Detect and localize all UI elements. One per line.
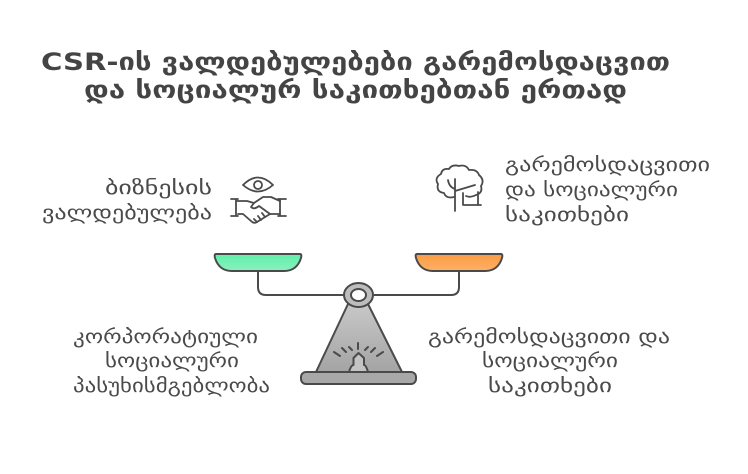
title: და სოციალურ საკითხებთან ერთად [84, 76, 627, 104]
text block: environmental and social issues (bottom right): საკითხები [488, 374, 612, 397]
text block: corporate social responsibility: კორპორატიული [73, 325, 258, 348]
text block: environmental and social issues (top right) [505, 153, 710, 226]
text block: environmental and social issues (top right): საკითხები [505, 203, 629, 226]
left pan: green [215, 254, 301, 271]
base [301, 372, 416, 384]
right pan: orange [416, 254, 502, 271]
icon: eye and handshake [231, 178, 286, 223]
text block: environmental and social issues (top right): და სოციალური [505, 178, 678, 201]
balance scale [215, 254, 502, 384]
icon: tree [437, 165, 483, 211]
text block: corporate social responsibility: სოციალური [105, 349, 239, 372]
text block: business obligation: ვალდებულება [42, 201, 212, 224]
pivot [344, 283, 373, 307]
text block: corporate social responsibility: პასუხისმგებლობა [73, 374, 270, 397]
beam arms [258, 271, 459, 295]
title [41, 48, 670, 104]
text block: environmental and social issues (bottom right): გარემოსდაცვითი და [428, 325, 670, 348]
alert light [349, 353, 368, 372]
text block: environmental and social issues (bottom right): სოციალური [482, 349, 618, 372]
text block: business obligation [42, 176, 212, 224]
text block: corporate social responsibility [73, 325, 270, 397]
text block: business obligation: ბიზნესის [105, 176, 212, 199]
title: CSR-ის ვალდებულებები გარემოსდაცვით [41, 48, 670, 76]
stand [316, 304, 402, 372]
text block: environmental and social issues (bottom right) [428, 325, 670, 397]
text block: environmental and social issues (top right): გარემოსდაცვითი [505, 153, 710, 176]
